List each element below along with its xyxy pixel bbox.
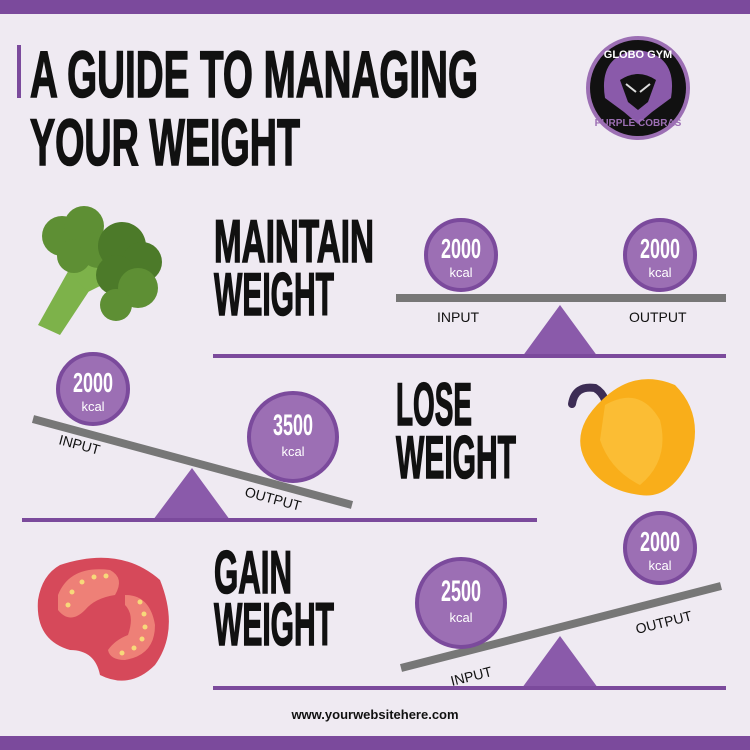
logo: Globo Gym Purple Cobras: PURPLE COBRAS <box>595 118 682 129</box>
scale: gain: kcal <box>449 610 473 625</box>
top band <box>0 0 750 14</box>
heading: gain weight: WEIGHT <box>214 591 334 658</box>
heading: lose weight: LOSE <box>396 371 472 438</box>
heading: gain weight: GAIN <box>214 539 292 606</box>
scale: gain: OUTPUT <box>634 607 694 637</box>
scale: maintain: 2000 <box>640 233 680 264</box>
scale: gain: 2000 <box>640 526 680 557</box>
scale: lose: 2000 <box>73 367 113 398</box>
scale: maintain: OUTPUT <box>629 309 687 325</box>
heading: gain weight <box>214 539 334 658</box>
scale: maintain <box>213 220 726 358</box>
scale: maintain: 2000 <box>441 233 481 264</box>
heading: lose weight: WEIGHT <box>396 424 516 491</box>
logo: Globo Gym Purple Cobras <box>586 36 690 140</box>
scale: lose: kcal <box>281 444 305 459</box>
logo: Globo Gym Purple Cobras: GLOBO GYM <box>604 49 672 61</box>
scale: lose: INPUT <box>57 431 102 458</box>
scale: gain <box>213 513 726 690</box>
scale: lose: 3500 <box>273 409 313 442</box>
scale: lose <box>22 354 537 522</box>
heading: maintain weight: MAINTAIN <box>214 208 374 275</box>
bottom band <box>0 736 750 750</box>
scale: maintain: INPUT <box>437 309 479 325</box>
scale: maintain: kcal <box>648 265 672 280</box>
scale: lose: kcal <box>81 399 105 414</box>
icon: broccoli <box>38 206 162 335</box>
icon: tomato <box>38 558 169 681</box>
icon: yellow pepper <box>572 379 695 496</box>
scale: gain: INPUT <box>449 663 494 689</box>
scale: lose: OUTPUT <box>243 483 303 514</box>
website url: www.yourwebsitehere.com <box>290 707 459 722</box>
heading: lose weight <box>396 371 516 491</box>
scale: gain: 2500 <box>441 575 481 608</box>
heading: maintain weight: WEIGHT <box>214 261 334 328</box>
title <box>17 37 478 179</box>
heading: maintain weight <box>214 208 374 328</box>
title: YOUR WEIGHT <box>30 105 300 179</box>
scale: maintain: kcal <box>449 265 473 280</box>
scale: gain: kcal <box>648 558 672 573</box>
